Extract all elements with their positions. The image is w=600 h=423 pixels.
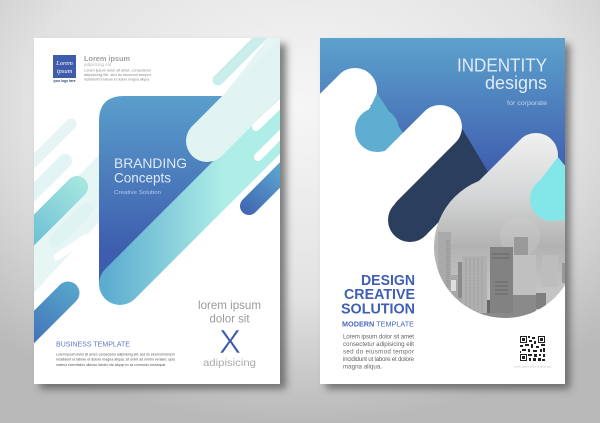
business template text [56, 340, 176, 367]
business template text: Lorem ipsum dolor sit amet, consectetur adipisicing elit, sed do eiusmod tempor [56, 352, 176, 356]
lower right tagline: adipisicing [203, 357, 256, 369]
design heading: SOLUTION [341, 302, 415, 318]
QR caption: Lorem ipsum dolor sit amet text [514, 366, 551, 368]
QR code [520, 336, 545, 361]
lower right tagline: dolor sit [210, 312, 250, 326]
identity title [457, 56, 547, 107]
design heading: CREATIVE [344, 287, 415, 303]
design heading [341, 273, 415, 318]
identity title: INDENTITY [457, 56, 547, 76]
blue pill right [240, 162, 280, 215]
modern template subheading: MODERN TEMPLATE [342, 322, 414, 329]
panel: right brochure page [320, 38, 565, 384]
logo: your logo here [53, 79, 76, 83]
gray pill [478, 133, 558, 184]
mint small pill [55, 209, 87, 241]
branding title: Concepts [114, 170, 171, 186]
logo: Lorem [55, 60, 73, 67]
white area left [320, 106, 403, 175]
design heading: DESIGN [361, 273, 415, 289]
logo: ipsum [57, 68, 73, 75]
left pale stripe [25, 124, 71, 170]
body paragraph [343, 334, 415, 370]
branding title [114, 155, 187, 196]
left pale band [34, 156, 99, 293]
body paragraph: incididunt ut labore et dolore [343, 356, 415, 363]
header text [84, 56, 152, 82]
header text: adipisicing elit, sed do eiusmod tempor [84, 73, 152, 77]
header text: incididunt ut labore et dolore magna aliqua. [84, 78, 150, 82]
body paragraph: consectetur adipisicing elit [343, 341, 414, 348]
white pill one [320, 68, 377, 106]
identity title: designs [485, 73, 547, 93]
teal shape [355, 93, 403, 152]
teal pill [20, 187, 77, 244]
pale diagonal pill [186, 94, 280, 162]
white stripes [252, 98, 280, 161]
business template text: incididunt ut labore et dolore magna aliqua. Ut enim ad minim veniam, quis [56, 358, 175, 362]
mint stripe top [218, 33, 265, 80]
lower right tagline [198, 298, 261, 369]
branding title: Creative Solution [114, 190, 161, 196]
white stripe lower [57, 238, 85, 257]
mint diagonal band [99, 98, 280, 305]
pale top right area [226, 38, 280, 92]
branding title: BRANDING [114, 155, 187, 171]
body paragraph: magna aliqua. [343, 363, 382, 370]
lower right tagline: lorem ipsum [198, 298, 261, 312]
business template text: nostrud exercitation ullamco laboris nisi aliquip ex ea commodo consequat. [56, 363, 166, 367]
blue header [320, 38, 565, 175]
white pill two [384, 105, 462, 202]
body paragraph: Lorem ipsum dolor sit amet [343, 334, 414, 341]
page shadows [40, 44, 570, 389]
white stripe upper [98, 155, 99, 156]
header text: Lorem ipsum dolor sit amet, consectetur [84, 68, 152, 72]
body paragraph: sed do eiusmod tempor [343, 349, 414, 356]
logo [53, 55, 76, 83]
rounded blue shape [99, 96, 235, 286]
header text: Lorem ipsum [84, 56, 130, 63]
pale pill [25, 161, 65, 201]
lower right tagline: X [219, 323, 241, 360]
header text: adipiscing elit [84, 62, 112, 67]
identity title: for corporate [507, 100, 547, 107]
navy band [388, 120, 488, 242]
mint shape [530, 157, 565, 221]
panel: left brochure page [34, 38, 280, 384]
business template text: BUSINESS TEMPLATE [56, 340, 130, 349]
city photo circle [434, 180, 565, 318]
blue pill left [20, 293, 68, 341]
